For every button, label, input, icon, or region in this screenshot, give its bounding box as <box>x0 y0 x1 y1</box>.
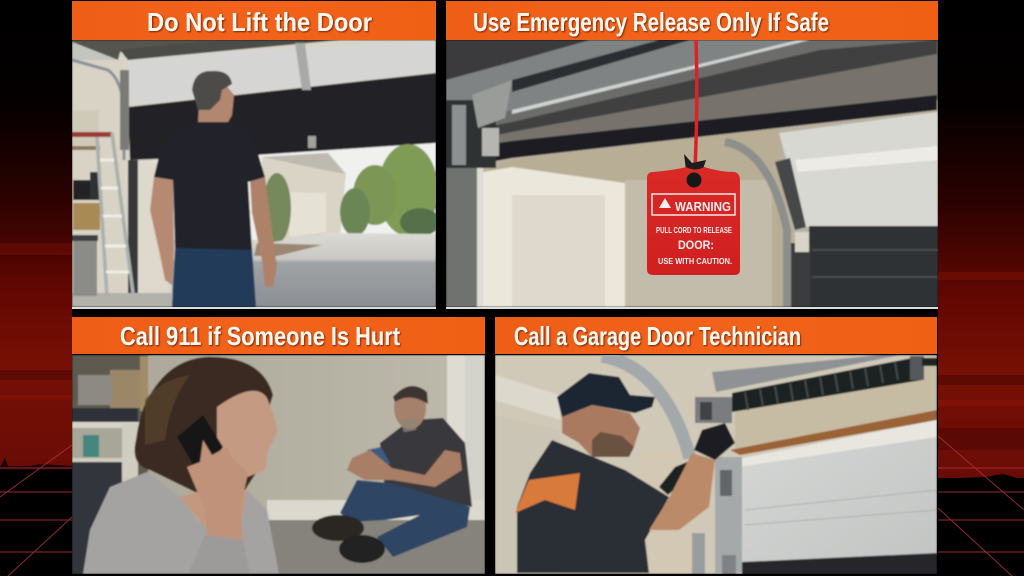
warning tag: DOOR: <box>678 240 714 252</box>
warning tag: PULL CORD TO RELEASE <box>656 225 732 235</box>
upper rails <box>494 40 938 126</box>
man: neck and face <box>198 85 234 122</box>
right door sections <box>779 112 938 227</box>
driveway <box>172 233 436 307</box>
woman: hand and forearm <box>187 440 248 543</box>
torsion spring <box>732 358 922 412</box>
man: hair <box>192 71 232 110</box>
warning tag <box>647 154 740 275</box>
man: left arm <box>150 177 174 285</box>
curved track <box>725 142 787 307</box>
panel: do not lift the door <box>72 1 440 309</box>
man sitting: head <box>394 396 426 429</box>
man: right arm <box>250 177 277 287</box>
panel: use emergency release only if safe <box>446 1 938 309</box>
overhead track <box>602 356 690 458</box>
heading: call a garage door technician: Call a Garage Door Technician <box>514 321 801 351</box>
panel: call a garage door technician <box>495 317 937 574</box>
man: jeans <box>172 248 256 307</box>
man: shirt <box>153 154 266 250</box>
release cord <box>695 40 697 170</box>
warning tag: USE WITH CAUTION. <box>658 256 732 266</box>
technician: second glove <box>659 460 692 495</box>
heading: call 911: Call 911 if Someone Is Hurt <box>120 321 400 351</box>
textured beam <box>500 54 936 142</box>
man sitting: boots <box>312 515 364 541</box>
white door panel <box>732 420 937 562</box>
background house <box>262 153 346 243</box>
spring bracket <box>695 397 732 423</box>
ladder <box>97 133 133 297</box>
warning triangle icon <box>659 198 671 208</box>
photo: release cord and warning tag <box>446 40 938 307</box>
technician: orange shoulder panel <box>515 473 580 513</box>
woman: hair <box>135 357 273 492</box>
man sitting: torso <box>380 418 472 507</box>
vertical track and hinges <box>692 533 705 574</box>
man sitting: arm and hands <box>347 450 462 487</box>
heading: do not lift the door: Do Not Lift the Door <box>147 7 372 37</box>
black seal <box>494 94 938 162</box>
photo: woman calling while injured man sits on floor <box>72 355 485 574</box>
trees <box>378 144 438 236</box>
shelves and bins <box>73 110 99 145</box>
panel: call 911 if someone is hurt <box>72 317 485 574</box>
technician: glove <box>694 423 735 460</box>
woman: face <box>217 391 277 478</box>
wall and header board <box>735 355 937 450</box>
technician: forearm <box>649 453 715 530</box>
technician: shirt <box>517 440 669 573</box>
metal brackets <box>446 100 496 168</box>
technician: face <box>562 405 640 457</box>
technician: cap <box>557 373 655 417</box>
phone <box>177 415 224 464</box>
heading: use emergency release: Use Emergency Release Only If Safe <box>473 7 829 37</box>
door opening <box>483 128 795 307</box>
man sitting: jeans <box>340 480 470 557</box>
woman: sweater <box>83 472 279 574</box>
photo: technician working on torsion spring <box>495 355 937 574</box>
warning tag: WARNING <box>675 200 731 214</box>
photo: man looking at stuck open garage door <box>72 40 440 307</box>
